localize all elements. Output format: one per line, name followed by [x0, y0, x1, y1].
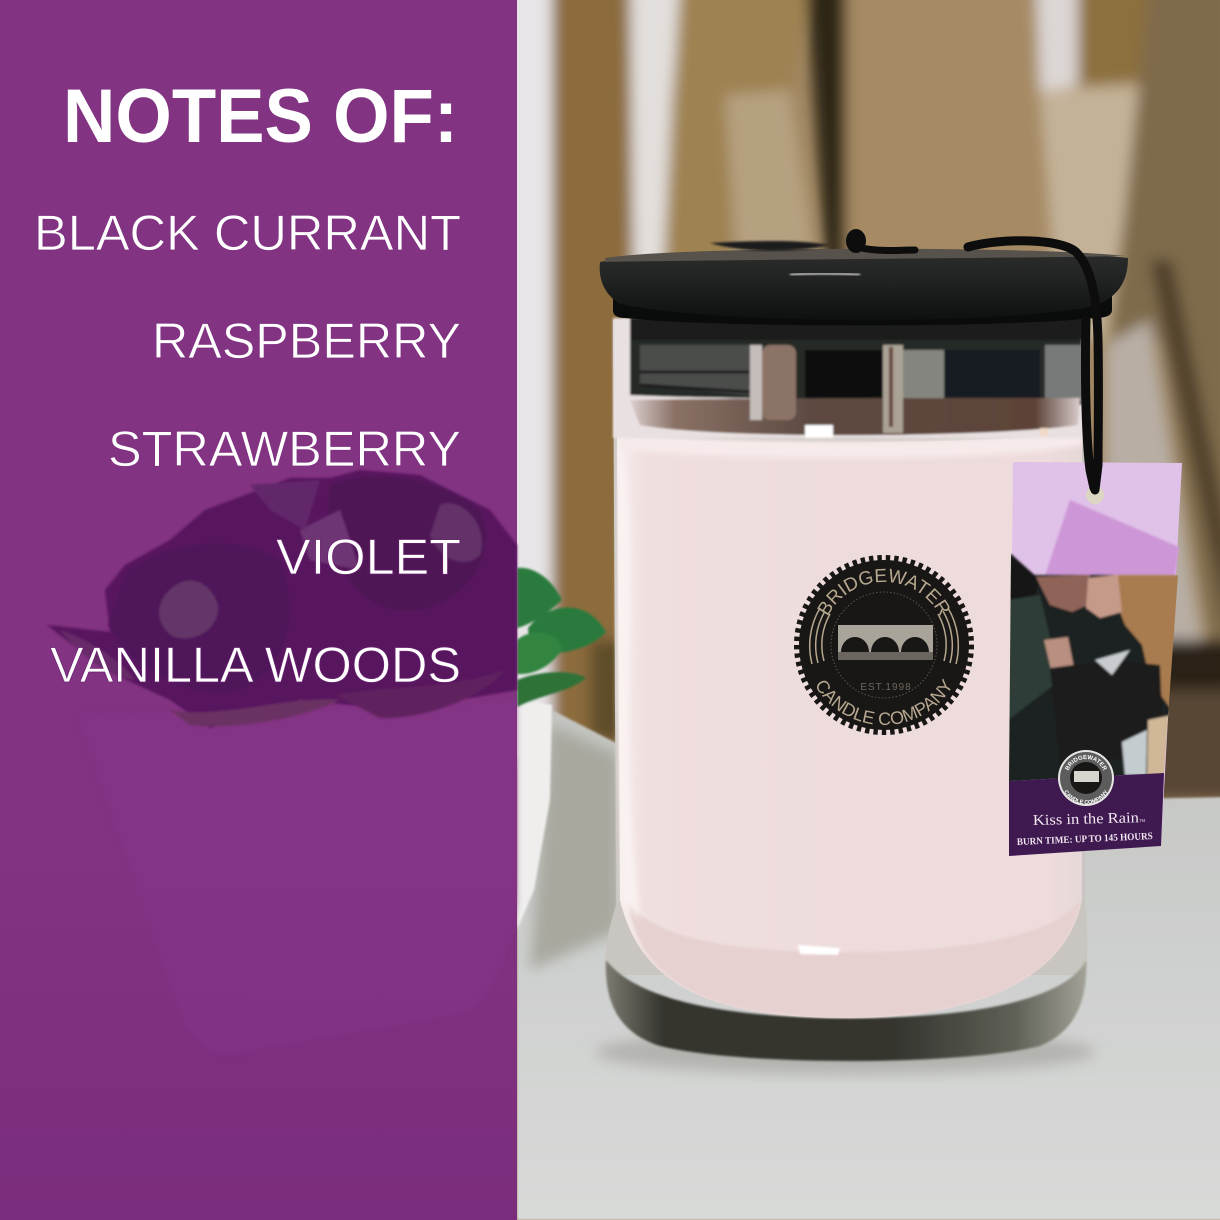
panel: purple notes panel	[0, 0, 517, 1220]
black string	[846, 229, 1098, 490]
mini logo on tag: CANDLE COMPANY	[1064, 790, 1108, 804]
wax left highlight	[617, 440, 640, 920]
candle jar	[596, 236, 1152, 1079]
mini logo on tag	[1058, 750, 1114, 806]
note: black currant: BLACK CURRANT	[34, 205, 461, 261]
mini logo on tag: BRIDGEWATER	[1064, 754, 1107, 771]
shelf surface	[517, 710, 1220, 1220]
dark glass base	[606, 960, 1086, 1061]
wax highlight	[798, 945, 840, 955]
glass jar body	[605, 320, 1087, 975]
icon: green succulent	[517, 568, 606, 707]
tag hole	[1086, 486, 1104, 504]
white pot edge	[517, 700, 552, 930]
badge bridge	[838, 625, 933, 660]
logo badge on jar	[794, 555, 974, 735]
umbrella on tag	[1045, 500, 1179, 576]
badge name: BRIDGEWATER	[817, 568, 950, 616]
jar lid	[600, 241, 1128, 326]
faded plant in panel	[47, 470, 517, 728]
tag burn time: BURN TIME: UP TO 145 HOURS	[1017, 831, 1153, 848]
faded pot in panel	[78, 700, 517, 1053]
wax top band	[617, 428, 1082, 458]
badge side lines	[810, 608, 958, 664]
jar shadow on shelf	[595, 1030, 1095, 1074]
wax lower ridge	[628, 900, 1080, 1018]
purple tag footer	[1009, 773, 1164, 856]
shadow beside jar	[530, 725, 620, 970]
tag photo: couple	[1005, 553, 1182, 785]
note: strawberry: STRAWBERRY	[108, 421, 461, 477]
heading: notes of: NOTES OF:	[63, 74, 458, 159]
hang tag	[1009, 462, 1182, 856]
tag trademark: TM	[1139, 818, 1145, 823]
glass neck	[613, 318, 1085, 438]
tag card	[1009, 462, 1182, 856]
tag product name: Kiss in the Rain	[1033, 810, 1140, 829]
candle wax	[617, 432, 1082, 1018]
note: raspberry: RASPBERRY	[152, 313, 461, 369]
note: vanilla woods: VANILLA WOODS	[50, 637, 461, 693]
badge est date: EST.1998	[860, 682, 912, 693]
badge company: CANDLE COMPANY	[817, 678, 951, 726]
background photo: wooden decor and shelf	[505, 0, 1220, 1220]
note: violet: VIOLET	[276, 529, 461, 585]
